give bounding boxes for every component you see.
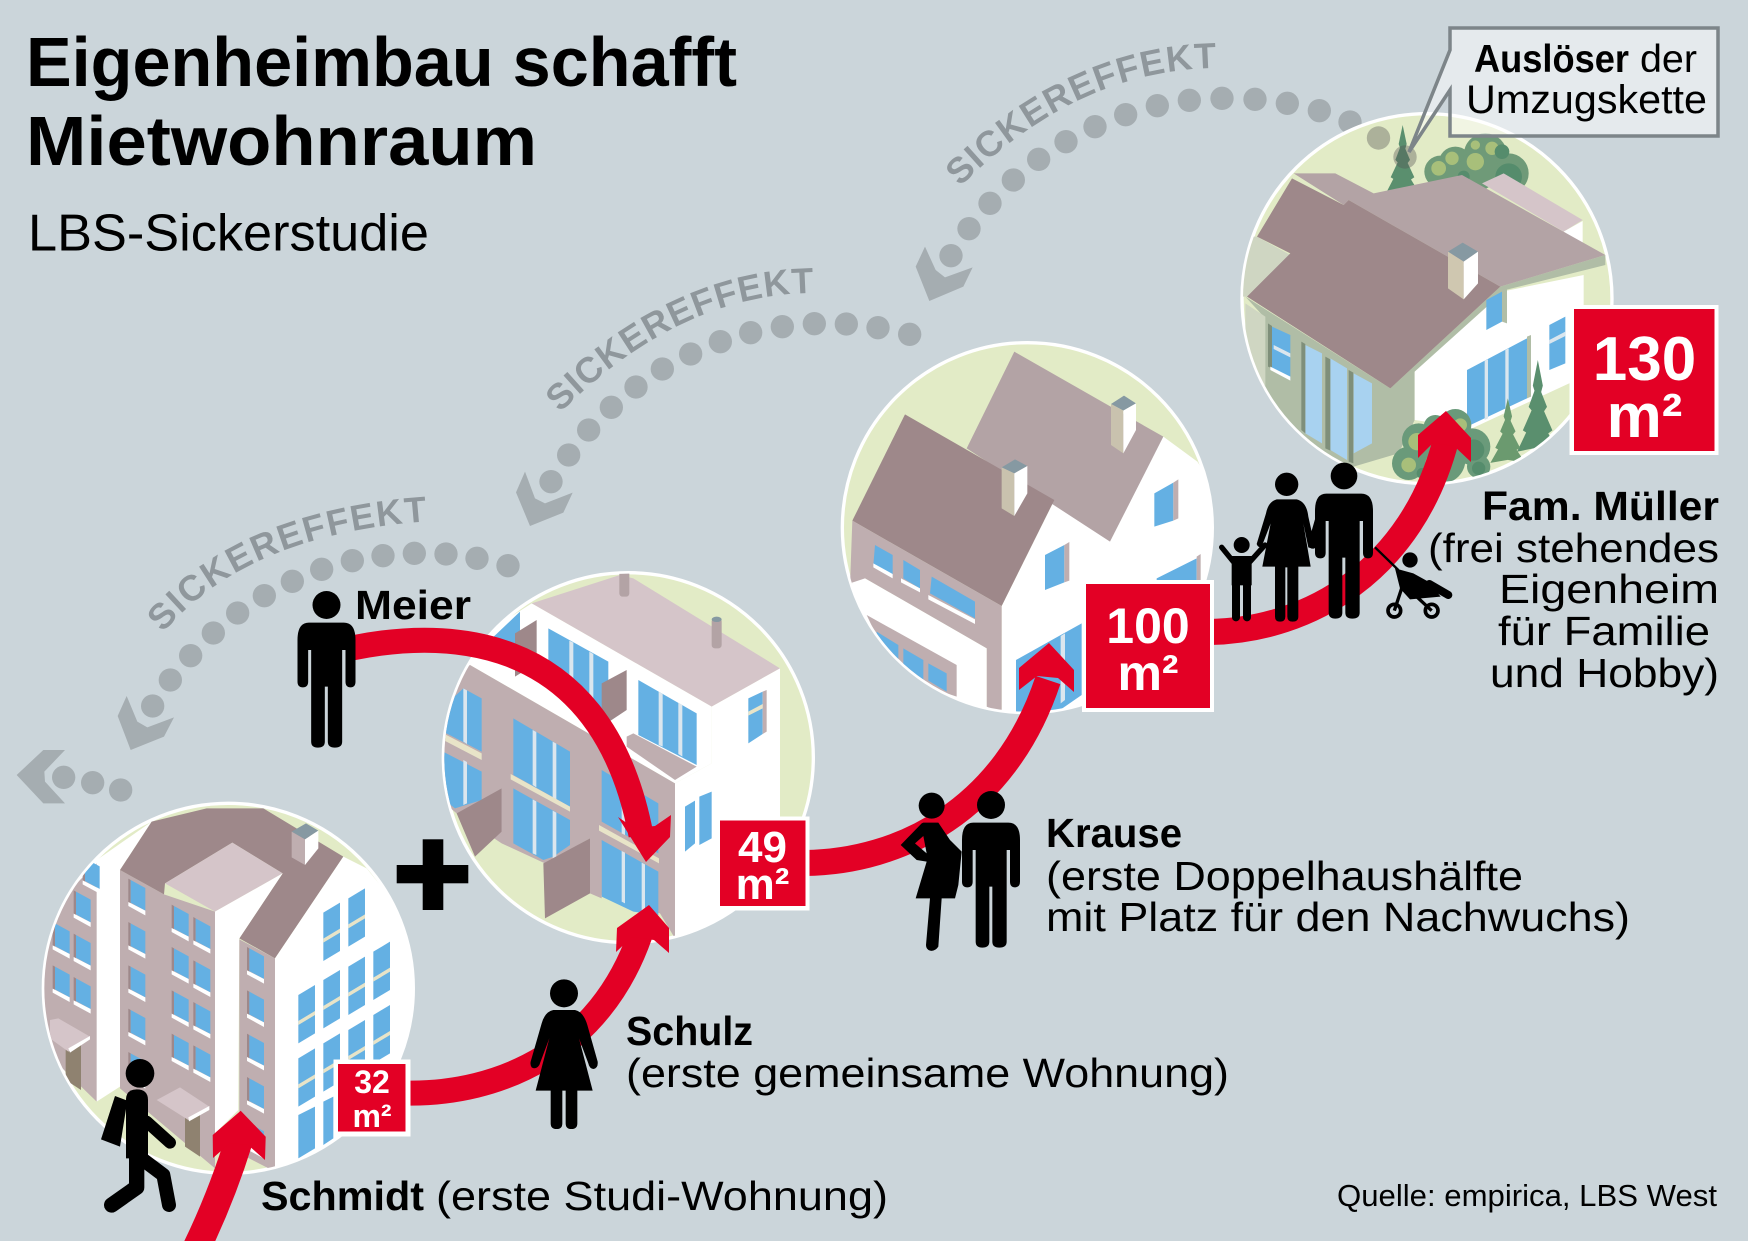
area badge: 49 m2: m²	[736, 860, 789, 909]
label: Fam. Mueller: (frei stehendes	[1428, 525, 1719, 571]
title	[26, 23, 737, 180]
panel: terraced house circle (Meier and Schulz)	[437, 570, 820, 943]
area badge: 130 m2	[1570, 305, 1718, 455]
label: Fam. Mueller: Eigenheim	[1499, 566, 1719, 612]
area badge: 49 m2	[716, 816, 810, 910]
icon: family Mueller with stroller	[1222, 463, 1448, 622]
label: Schmidt	[261, 1173, 888, 1219]
label: Schmidt: (erste Studi-Wohnung)	[436, 1173, 888, 1219]
arrow: Schmidt to Schulz	[405, 905, 669, 1093]
outgoing chevron and dots, bottom left	[17, 750, 132, 803]
arrow: terraced house to Krause home	[805, 643, 1074, 863]
source: Quelle: empirica, LBS West	[1337, 1178, 1717, 1213]
sickereffekt label 1: SICKEREFFEKT	[148, 496, 425, 629]
area badge: 32 m2: m²	[352, 1098, 392, 1134]
callout: Auslöser der Umzugskette: Umzugskette	[1466, 78, 1707, 122]
subtitle: LBS-Sickerstudie	[28, 204, 429, 262]
area badge: 32 m2: 32	[354, 1064, 390, 1100]
sickereffekt label 3: SICKEREFFEKT	[947, 43, 1216, 183]
label: Fam. Mueller: Fam. Müller	[1482, 483, 1719, 529]
label: Schmidt: Schmidt	[261, 1173, 424, 1219]
label: Fam. Mueller: für Familie	[1498, 608, 1710, 654]
area badge: 100 m2: 100	[1106, 598, 1190, 654]
label: Krause: (erste Doppelhaushälfte	[1046, 853, 1523, 899]
icon: Krause couple	[901, 791, 1020, 951]
sickereffekt chain 3: dots and chevron	[916, 87, 1362, 301]
title: Eigenheimbau schafft	[26, 23, 737, 101]
label: Schulz: Schulz	[626, 1008, 753, 1054]
label: Meier: Meier	[355, 582, 471, 628]
arrow: Krause home to Mueller home	[1210, 411, 1471, 632]
area badge: 100 m2	[1082, 580, 1214, 712]
area badge: 130 m2: 130	[1593, 325, 1696, 394]
area badge: 130 m2: m²	[1607, 382, 1682, 451]
label: Krause	[1046, 810, 1630, 940]
plus sign	[397, 839, 468, 910]
label: Fam. Mueller	[1428, 483, 1719, 696]
sickereffekt chain 1: dots and chevron	[118, 542, 520, 750]
callout: Auslöser der Umzugskette: Auslöser	[1474, 38, 1629, 81]
label: Krause: mit Platz für den Nachwuchs)	[1046, 894, 1630, 940]
arrow: into Schmidt's flat	[197, 1111, 266, 1241]
label: Schulz: (erste gemeinsame Wohnung)	[626, 1050, 1229, 1096]
sickereffekt chain 2: dots and chevron	[516, 312, 921, 526]
dots overlaying the home circle	[1367, 126, 1417, 169]
title: Mietwohnraum	[26, 102, 537, 180]
callout: Auslöser der Umzugskette	[1409, 28, 1718, 152]
label: Krause: Krause	[1046, 810, 1182, 856]
area badge: 49 m2: 49	[738, 823, 787, 872]
panel: semi-detached house circle (Krause)	[840, 343, 1220, 723]
panel: apartment block circle (Schmidt)	[40, 803, 417, 1173]
icon: walking student Schmidt	[101, 1059, 170, 1205]
label: Schulz	[626, 1008, 1229, 1096]
callout: Auslöser der Umzugskette: der	[1640, 38, 1697, 81]
icon: Meier man	[297, 591, 355, 748]
area badge: 32 m2	[334, 1060, 410, 1136]
sickereffekt label 2: SICKEREFFEKT	[547, 268, 812, 409]
panel: detached family home circle (Fam. Mueller)	[1242, 114, 1612, 484]
area badge: 100 m2: m²	[1117, 645, 1179, 701]
arrow: Meier into terraced house	[352, 640, 671, 862]
icon: Schulz woman	[530, 979, 598, 1129]
label: Fam. Mueller: und Hobby)	[1490, 650, 1719, 696]
